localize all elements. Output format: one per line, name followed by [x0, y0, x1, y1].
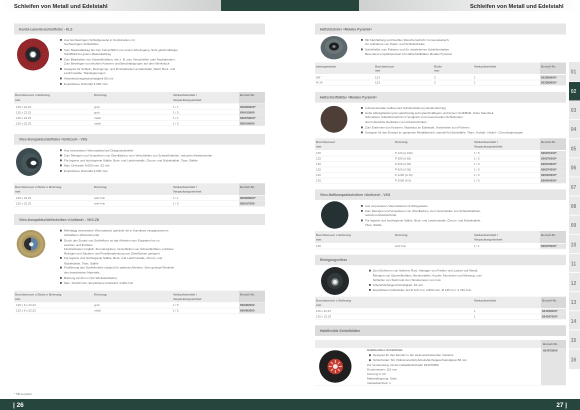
table: Verpackungseinheit — [173, 297, 201, 301]
feature list: Arbeitshöchstgeschwindigkeit: 63 m/s — [373, 283, 423, 287]
feature list: hochwertigem Schleifvlies — [64, 42, 99, 46]
page number left: | 26 — [13, 402, 24, 409]
feature list: reduziert Arbeitsschritte — [365, 213, 397, 217]
side navigation tabs: 02 — [571, 89, 576, 95]
table: grob — [94, 105, 100, 109]
table: 3 — [434, 81, 436, 85]
side navigation tabs: 05 — [571, 146, 576, 152]
table: 125 — [316, 156, 321, 160]
feature list: Schliffbild bei gutem Materialabtrag — [64, 52, 111, 56]
side navigation tabs: 12 — [571, 281, 576, 287]
feature list: durch deutliche Reduktion von Arbeitsschritten. — [365, 120, 428, 124]
feature list: Schleifen von Stahl und zum Strukturieren von Inox — [373, 278, 441, 282]
table: 123 — [375, 81, 380, 85]
table head — [315, 340, 566, 348]
table: Verkaufseinheit / — [173, 185, 197, 189]
table: 1 / 5 — [474, 156, 480, 160]
feature list: Vom Materialabtrag bis zum Feinschliff in nur einem Arbeitsgang. Sehr gleichmäßiges — [64, 48, 178, 52]
table: 1 — [474, 314, 476, 318]
table: sehr fein — [395, 244, 406, 248]
table: 5/8 " — [316, 76, 322, 80]
table: 626416000 — [240, 121, 255, 125]
feature list: Durch den Zusatz von Schleifkorn ist das Arbeiten vom Entgraten bis zu — [64, 238, 160, 242]
panel: Reinigungsvliess — [315, 255, 566, 320]
table: Bestell-Nr. — [542, 298, 557, 302]
table: 125 — [316, 162, 321, 166]
side navigation tabs: 08 — [571, 204, 576, 210]
table: 624346000* — [542, 309, 558, 313]
table — [315, 62, 566, 86]
feature list: Leichtmetalle, Titanlegierungen — [64, 71, 106, 75]
table: Bestell-Nr. — [240, 185, 255, 189]
table: Innengewinde — [316, 64, 336, 68]
table: Verpackungseinheit — [173, 98, 201, 102]
table: Durchmesser x Dicke x Bohrung — [15, 292, 62, 296]
panel: Vlies-Kompaktschleifscheiben VKS-ZK: Vlies-Kompaktschleifscheiben «Unitized» - VKS-ZK — [19, 218, 100, 222]
table: 1 / 5 — [474, 168, 480, 172]
table: 626371000* — [541, 151, 557, 155]
feature list: Schnellerer Arbeitsfortschritt im Vergleich zu konventionellen Schleifmittel — [365, 115, 463, 119]
panel: Halbflexible Schleifblätter — [315, 325, 566, 386]
feature list: Mit Kletthaftung und flexibler Zwischenschicht, formenelastisch; — [365, 38, 449, 42]
side navigation tabs: 07 — [571, 185, 576, 191]
panel: Haftstützteller Metabo Pyramid — [315, 24, 566, 86]
table: 1 / 5 — [474, 151, 480, 155]
side navigation tabs: 16 — [571, 358, 576, 364]
feature list: Schleifteller zum Polieren und für mittelebenes Schleifverhalten. — [365, 48, 450, 52]
table: Verpackungseinheit — [474, 238, 502, 242]
table: 125 x 22,23 — [16, 110, 32, 114]
icon: dark velcro disc — [321, 201, 348, 229]
table: Bestell-Nr. — [240, 93, 255, 97]
feature list: Max. 10.000 /min; Empfohlene Drehzahl: 3.000 /min — [64, 281, 134, 285]
feature list: Arbeitshöchstgeschwindigkeit 80 m/s — [64, 76, 114, 80]
table: Bestell-Nr. — [240, 292, 255, 296]
table: 1 / 5 — [173, 121, 179, 125]
table: 626404000* — [541, 178, 557, 182]
table: 1 / 1 — [173, 116, 179, 120]
page footer band — [0, 399, 580, 410]
feature list: Reinigen von Schweißnähten, Buntmetallen, Kupfer, Aluminium und Messing, zum — [373, 274, 482, 278]
feature list: Mehrlagig verpresstes Vliesmaterial, getränkt mit in Kunstharz eingegossenem — [64, 229, 169, 233]
table: 125 x 22,23 — [16, 105, 32, 109]
feature list: Empfohlene Drehzahl 3.000 /min — [64, 82, 108, 86]
panel: Haftschleifblätter Metabo Pyramid: Haftschleifblätter «Metabo Pyramid» — [320, 96, 377, 100]
product description: Verkaufseinheit: 1 — [367, 381, 391, 385]
table: 125 — [316, 151, 321, 155]
table: 125 x 22,23 — [16, 196, 32, 200]
table: sehr fein — [94, 196, 105, 200]
feature list — [60, 38, 178, 86]
table: 1 / 1 — [173, 196, 179, 200]
table: 1 / 5 — [474, 162, 480, 166]
table: mm — [375, 68, 381, 72]
product description: Halbflexibles Schleifblatt — [367, 348, 403, 352]
table: P 400 (A 45) — [395, 162, 411, 166]
table: Körnung — [94, 93, 107, 97]
panel: Vlies-Haftkompaktscheiben VKS: Vlies-Haftkompaktscheiben «Unitized» - VKS — [320, 193, 391, 197]
table: Körnung — [395, 233, 408, 237]
product description: Zur Verwendung mit dem Elastikstützteller 623278000 — [367, 363, 439, 367]
table: 123 — [375, 76, 380, 80]
feature list: Zum Reinigen und Vorpolieren von Oberflächen, zum Verschleifen von Schweißnähten, reduziert Arbeitsschritte — [64, 154, 212, 158]
table: Durchmesser x Bohrung — [316, 233, 351, 237]
table: 125 x 6 x 22,23 — [16, 309, 36, 313]
side navigation tabs: 10 — [571, 242, 576, 248]
table: 125 x 22,23 — [316, 314, 332, 318]
table: Durchmesser x Bohrung — [15, 93, 50, 97]
feature list — [60, 229, 174, 285]
table: mm — [15, 98, 21, 102]
side navigation tabs: 14 — [571, 319, 576, 325]
table: 626400000* — [541, 173, 557, 177]
table head: Bestell-Nr. — [543, 342, 558, 346]
table — [315, 138, 566, 184]
feature list: Bohrung 22,23 mm (für Winkelschleifer) — [64, 276, 117, 280]
panel: Reinigungsvliess: Reinigungsvliess — [320, 258, 347, 262]
feature list: weichen und flexiblen — [64, 243, 93, 247]
feature list — [60, 148, 212, 173]
icon: brown sanding disc — [321, 106, 347, 133]
table: 626368000* — [240, 196, 256, 200]
table: Verkaufseinheit / — [173, 292, 197, 296]
table: Körnung — [94, 185, 107, 189]
table: 626375000* — [541, 244, 557, 248]
feature list — [361, 38, 452, 56]
table: P 1200 (A 16) — [395, 173, 413, 177]
table: Verkaufseinheit / — [474, 233, 498, 237]
page number right: 27 | — [556, 402, 567, 409]
feature list: Aus verpresstem Vliesmaterial mit Wirkgewebe — [365, 204, 428, 208]
feature list — [369, 269, 482, 292]
product description: 624073000 — [543, 348, 558, 352]
table: Verkaufseinheit — [474, 64, 496, 68]
table: Verkaufseinheit / — [173, 93, 197, 97]
table: mm — [316, 303, 322, 307]
table: 1 / 5 — [173, 110, 179, 114]
page header band — [0, 0, 580, 11]
table: Verpackungseinheit — [474, 145, 502, 149]
table: 125 x 22,23 — [16, 121, 32, 125]
table: P 600 (A 30) — [395, 168, 411, 172]
feature list: Geeignet für den Einsatz im gesamten Metallbereich, speziell für Edelstähle, Titan-, Kobalt-, Nickel-, Chromlegierungen — [365, 130, 523, 134]
feature list: Zum Beseitigen von leichten Kratzern und Beschädigungen auf dem Werkstück — [64, 62, 170, 66]
table — [315, 231, 566, 249]
panel: Kombi-Lamellenschleifteller: Kombi-Lamellenschleifteller - KLS — [19, 27, 73, 31]
product description — [367, 348, 558, 385]
icon: black disc with red hub — [319, 350, 351, 383]
table: grob — [94, 110, 100, 114]
table: 1 / 5 — [173, 303, 179, 307]
icon: golden fleece disc — [17, 230, 45, 258]
feature list: Für legierte und hochlegierte Stähle, Bunt- und Leichtmetalle, Chrom- und Nickelstähle, — [365, 218, 481, 222]
feature list: Zum Bearbeiten von Schweißnähten, wie z. B. zum Verschleifen oder Nacharbeiten. — [64, 57, 176, 61]
feature list: des bearbeiteten Materials. — [64, 270, 100, 274]
table: Durchmesser — [375, 64, 395, 68]
table: mm — [434, 68, 440, 72]
panel: Vlies-Haftkompaktscheiben VKS — [315, 189, 566, 249]
table: mittel — [94, 116, 101, 120]
table: 125 — [316, 178, 321, 182]
panel: Vlies-Kompaktschleifteller VKS — [14, 134, 265, 206]
table: 3 — [434, 76, 436, 80]
side navigation tabs: 04 — [571, 127, 576, 133]
feature list: Empfohlene Drehzahlen bei Ø 115 mm: 2.800 /min, Ø 125 mm: 2.700 /min — [373, 288, 472, 292]
product description: Geeignet für den Einsatz in der steinverarbeitenden Industrie — [373, 353, 454, 357]
table: 626483000 — [240, 309, 255, 313]
table: M 14 — [316, 81, 323, 85]
table: P 120 (A 160) — [395, 151, 413, 155]
table: Durchmesser — [316, 140, 336, 144]
table: mm — [15, 297, 21, 301]
table: Verkaufseinheit / — [474, 140, 498, 144]
table: 125 x 22,23 — [16, 116, 32, 120]
icon: dark fleece disc — [16, 148, 42, 176]
footnote: * SB-verpackt — [14, 392, 32, 396]
feature list: Zum Entfernen von leichtem Rost, Abtragen von Farben und Lacken auf Metall, — [373, 269, 478, 273]
feature list: 3-dimensionaler Aufbau des Schleifmittels (pyramidenförmig) — [365, 106, 446, 110]
table: Durchmesser x Dicke x Bohrung — [15, 185, 62, 189]
table: Durchmesser x Bohrung — [316, 298, 351, 302]
product description: Schleifmittel: SiC (Siliciumcarbid).Arbeitshöchstgeschwindigkeit 80 m/s — [373, 358, 467, 362]
feature list: Max. Drehzahl: 8.000 /min, 52 m/s — [64, 164, 110, 168]
table — [14, 291, 265, 314]
table: 626415000 — [240, 110, 255, 114]
table: 1 / 5 — [474, 173, 480, 177]
side navigation tabs: 01 — [571, 70, 576, 76]
panel: Halbflexible Schleifblätter: Halbflexible Schleifblätter — [320, 329, 361, 333]
feature list: Für legierte und hochlegierte Stähle, Bunt- und Leichtmetalle, Chrom- und Nickelstähle, Titan, Stähle — [64, 158, 198, 162]
table: 115 x 22,23 — [316, 309, 331, 313]
table: 626369000* — [240, 105, 256, 109]
table: 125 — [316, 244, 321, 248]
feature list: Besonders empfehlenswert für Haftschleifblätter Metabo Pyramid — [365, 52, 452, 56]
table: Bestell-Nr. — [541, 233, 556, 237]
panel: Vlies-Kompaktschleifteller VKS: Vlies-Kompaktschleifteller «Unitized» - VKS — [19, 138, 88, 142]
table: 626482000 — [240, 303, 255, 307]
table: grob — [94, 303, 100, 307]
page title right: Schleifen von Metall und Edelstahl — [470, 4, 564, 10]
table: 1 — [474, 76, 476, 80]
feature list: Geeignet für Schleif-, Reinigungs- und Finisharbeiten an Edelstahl, Stahl, Bunt- und — [64, 67, 175, 71]
feature list: Reinigen und Säubern und Finishbearbeitung von Oberflächen geeignet — [64, 252, 160, 256]
table: 626417000 — [240, 202, 255, 206]
table: P 280 (A 65) — [395, 156, 411, 160]
feature list: Zum Entfernen von Kratzern, Walzhaut an Edelstahl. Vorbereiten zum Polieren — [365, 126, 470, 130]
table: 125 x 6 x 22,23 — [16, 303, 36, 307]
feature list: Zum Reinigen und Vorpolieren von Oberflächen, zum Verschleifen von Schweißnähten, — [365, 209, 481, 213]
table: 626379000* — [240, 116, 256, 120]
table: 623289000* — [541, 76, 557, 80]
table: 1 / 5 — [173, 309, 179, 313]
side navigation tabs: 11 — [571, 262, 576, 268]
table: 1 — [474, 81, 476, 85]
table: 623389000* — [541, 81, 557, 85]
table: 626374000* — [541, 168, 557, 172]
feature list — [361, 204, 481, 227]
table — [315, 297, 566, 320]
side navigation tabs: 13 — [571, 300, 576, 306]
table: 1 / 1 — [474, 244, 480, 248]
panel: Haftstützteller Metabo Pyramid: Haftstützteller «Metabo Pyramid» — [320, 27, 372, 31]
table: 125 x 22,23 — [16, 202, 32, 206]
table: Verkaufseinheit — [474, 298, 496, 302]
table — [14, 92, 265, 126]
table: 1 / 1 — [173, 105, 179, 109]
table: Bestell-Nr. — [541, 64, 556, 68]
panel: Haftschleifblätter Metabo Pyramid — [315, 92, 566, 184]
page title left: Schleifen von Metall und Edelstahl — [14, 4, 108, 10]
table: sehr fein — [94, 202, 105, 206]
side navigation tabs: 06 — [571, 166, 576, 172]
table: 125 — [316, 173, 321, 177]
table: 1 / 5 — [474, 178, 480, 182]
feature list: Finisharbeiten möglich. Zum Entgraten, Verschleifen von Schweißnähten, präzises — [64, 247, 174, 251]
table: 1 — [474, 309, 476, 313]
side navigation tabs: 03 — [571, 108, 576, 114]
table: Körnung — [395, 140, 408, 144]
table: mm — [316, 238, 322, 242]
table: 1 / 5 — [173, 202, 179, 206]
table: 626372000* — [541, 156, 557, 160]
feature list — [361, 106, 523, 134]
table: mittel — [94, 121, 101, 125]
panel: Vlies-Kompaktschleifscheiben VKS-ZK — [14, 214, 265, 314]
feature list: Für legierte und hochlegierte Stähle, Bunt- und Leichtmetalle, Chrom- und — [64, 256, 163, 260]
feature list: Aus hochwertigem Schleifgewebe in Kombination mit — [64, 38, 135, 42]
side navigation tabs: 09 — [571, 223, 576, 229]
feature list: Nickelstähle, Titan, Stähle — [64, 262, 99, 266]
feature list: zur Aufnahme von Polier- und Schleifscheibe — [365, 42, 425, 46]
table: Körnung — [94, 292, 107, 296]
table: mittel — [94, 309, 101, 313]
icon: backing pad — [321, 36, 347, 59]
icon: red flap disc — [17, 38, 49, 70]
icon: cleaning fleece disc — [321, 267, 349, 295]
feature list: Hohe Abtragsleistung bei gleichzeitig sehr gleichmäßigem und feinem Schliffbild. Hohe Standzeit. — [365, 111, 494, 115]
table — [14, 183, 265, 206]
feature list: Titan, Stähle — [365, 223, 382, 227]
table: 125 — [316, 168, 321, 172]
table: 626373000* — [541, 162, 557, 166]
panel: Kombi-Lamellenschleifteller — [14, 24, 265, 126]
table: P 2000 (A 6) — [395, 178, 411, 182]
feature list: Schleifkorn (Zirkonkorund) — [64, 233, 99, 237]
table: Bestell-Nr. — [541, 140, 556, 144]
side navigation tabs: 15 — [571, 338, 576, 344]
feature list: Empfohlene Drehzahl 3.000 /min — [64, 169, 108, 173]
feature list: Profilierung des Schleifmittels möglich für präzises Arbeiten. Sehr geringe Restteile — [64, 266, 174, 270]
table: Dicke — [434, 64, 442, 68]
table: mm — [15, 190, 21, 194]
feature list: Aus verpresstem Vliesmaterial auf Glasgewebeteller — [64, 148, 134, 152]
product description: Körnung C 24 — [367, 372, 386, 376]
side navigation tabs — [569, 62, 580, 369]
product description: Materialeignung: Stein — [367, 377, 397, 381]
table: mm — [316, 145, 322, 149]
table: Verpackungseinheit — [173, 190, 201, 194]
table: 624347000* — [542, 314, 558, 318]
product description: Durchmesser: 115 mm — [367, 368, 398, 372]
